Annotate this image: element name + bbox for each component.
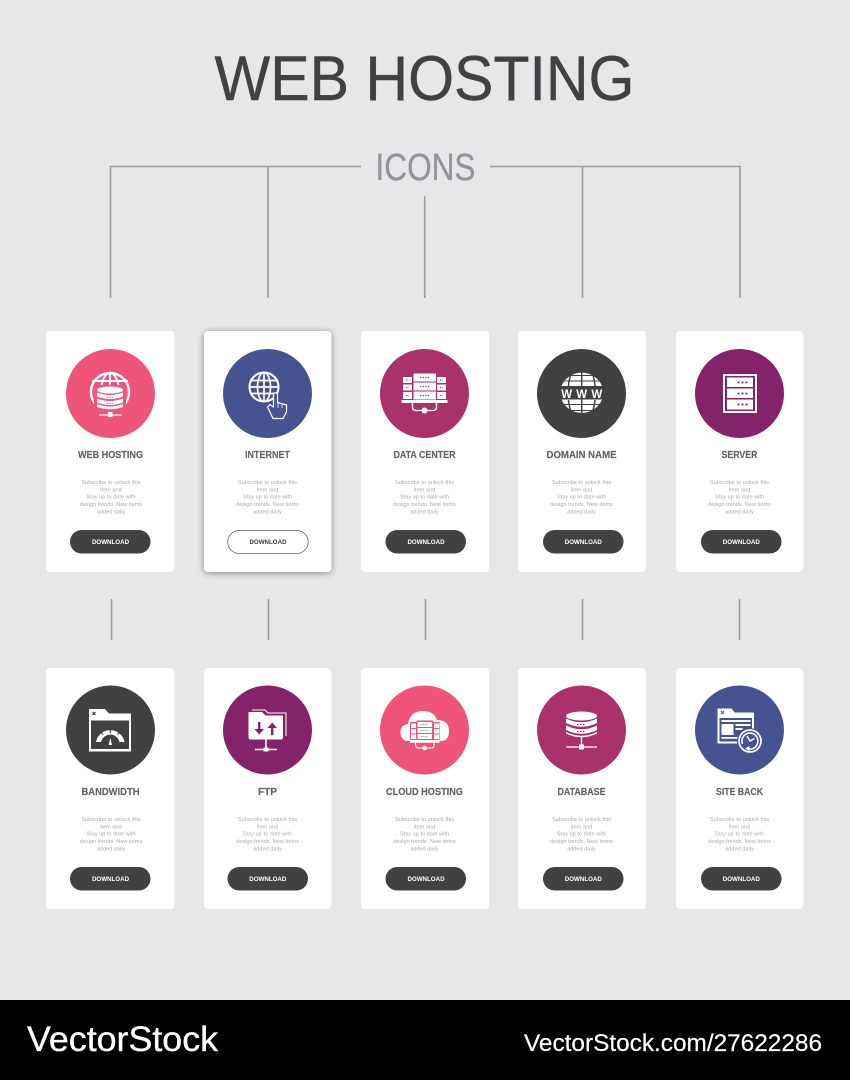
description: Subscribe to unlock this: [395, 480, 454, 486]
button: DOWNLOAD: [407, 876, 445, 883]
card: cloud hosting: [361, 668, 489, 909]
label: SITE BACK: [716, 787, 764, 798]
card: web hosting: [46, 331, 174, 572]
icon: site backup: [718, 708, 763, 754]
label: CLOUD HOSTING: [386, 787, 463, 798]
card: database: [518, 668, 646, 909]
label: INTERNET: [245, 450, 290, 461]
description: added daily: [97, 509, 126, 515]
circle: [695, 349, 784, 438]
label: BANDWIDTH: [82, 787, 140, 798]
description: Stay up to date with: [400, 495, 449, 501]
description: added daily: [410, 509, 439, 515]
icon: cloud with servers: [400, 711, 449, 750]
description: design trends. New items: [236, 839, 299, 845]
description: item and: [100, 487, 122, 493]
description: added daily: [725, 846, 754, 852]
circle: [380, 686, 469, 774]
description: added daily: [410, 846, 439, 852]
description: Stay up to date with: [400, 832, 449, 838]
description: Subscribe to unlock this: [81, 480, 141, 486]
button: [228, 867, 308, 890]
card: bandwidth: [46, 668, 174, 909]
icon: www globe: [560, 368, 604, 416]
description: design trends. New items: [550, 839, 613, 845]
icon: globe with database: [91, 373, 129, 417]
description: item and: [414, 824, 435, 830]
subtitle: icons: ICONS: [376, 147, 476, 189]
description: Subscribe to unlock this: [710, 817, 769, 823]
description: design trends. New items: [393, 839, 456, 845]
description: Subscribe to unlock this: [552, 480, 611, 486]
card: server: [676, 331, 804, 572]
circle: [380, 349, 469, 438]
button: [386, 867, 466, 890]
card: internet (highlighted): [204, 331, 332, 573]
description: added daily: [253, 846, 282, 852]
button: DOWNLOAD: [407, 539, 445, 546]
description: added daily: [253, 509, 282, 515]
description: design trends. New items: [80, 839, 143, 845]
icon: folder transfer: [248, 710, 286, 752]
description: Stay up to date with: [243, 832, 292, 838]
description: Stay up to date with: [557, 832, 606, 838]
button: DOWNLOAD: [723, 876, 760, 883]
description: Subscribe to unlock this: [710, 480, 769, 486]
description: Stay up to date with: [715, 832, 764, 838]
description: design trends. New items: [80, 502, 143, 508]
description: Subscribe to unlock this: [81, 817, 141, 823]
button: [543, 530, 624, 554]
title: WEB HOSTING: [214, 44, 634, 114]
card: site back: [676, 668, 804, 909]
description: item and: [257, 487, 278, 493]
description: added daily: [567, 846, 596, 852]
button: [701, 867, 782, 890]
label: SERVER: [722, 450, 758, 461]
description: item and: [729, 824, 750, 830]
circle: [223, 686, 312, 774]
description: design trends. New items: [393, 502, 456, 508]
icon: globe with hand: [250, 372, 286, 418]
card: ftp: [204, 668, 332, 909]
button: [543, 867, 624, 890]
icon: www globe: WWW: [561, 389, 602, 401]
button: [386, 530, 466, 554]
description: design trends. New items: [708, 502, 771, 508]
description: added daily: [567, 509, 596, 515]
label: FTP: [258, 787, 277, 798]
circle: [537, 686, 626, 774]
circle: [695, 686, 784, 774]
button: DOWNLOAD: [565, 539, 602, 546]
icon: server cabinet: [724, 375, 756, 412]
description: Subscribe to unlock this: [238, 817, 297, 823]
description: added daily: [725, 509, 754, 515]
button: [701, 530, 782, 554]
description: item and: [414, 487, 435, 493]
card: data center: [361, 331, 489, 572]
button: DOWNLOAD: [249, 876, 287, 883]
description: Stay up to date with: [715, 495, 764, 501]
description: item and: [729, 487, 750, 493]
footer url: VectorStock.com/27622286: [524, 1030, 822, 1057]
label: DOMAIN NAME: [546, 450, 617, 461]
description: item and: [571, 487, 592, 493]
description: design trends. New items: [708, 839, 771, 845]
description: Subscribe to unlock this: [238, 480, 297, 486]
label: DATA CENTER: [394, 450, 456, 461]
label: DATABASE: [558, 787, 606, 798]
circle: [223, 349, 312, 438]
circle: [66, 686, 155, 774]
card: domain name: [518, 331, 646, 572]
circle: [66, 349, 155, 438]
description: Stay up to date with: [86, 832, 136, 838]
button: DOWNLOAD: [565, 876, 602, 883]
circle: [537, 349, 626, 438]
description: Subscribe to unlock this: [395, 817, 454, 823]
icon: server racks: [402, 374, 448, 414]
button: DOWNLOAD: [92, 876, 130, 883]
description: design trends. New items: [236, 502, 299, 508]
description: item and: [257, 824, 278, 830]
icon: database: [566, 712, 597, 750]
description: added daily: [97, 846, 126, 852]
button: [70, 530, 150, 554]
button: DOWNLOAD: [723, 539, 760, 546]
button: [70, 867, 150, 890]
icon: browser gauge: [89, 709, 131, 752]
description: item and: [571, 824, 592, 830]
description: Stay up to date with: [243, 495, 292, 501]
description: Stay up to date with: [557, 495, 606, 501]
button: DOWNLOAD: [92, 539, 130, 546]
button: DOWNLOAD: [249, 539, 287, 546]
label: WEB HOSTING: [78, 450, 143, 461]
description: Subscribe to unlock this: [552, 817, 611, 823]
footer logo: VectorStock: [27, 1020, 219, 1059]
button: [228, 530, 308, 554]
footer bar: [0, 1000, 850, 1080]
description: item and: [100, 824, 122, 830]
description: design trends. New items: [550, 502, 613, 508]
description: Stay up to date with: [86, 495, 136, 501]
